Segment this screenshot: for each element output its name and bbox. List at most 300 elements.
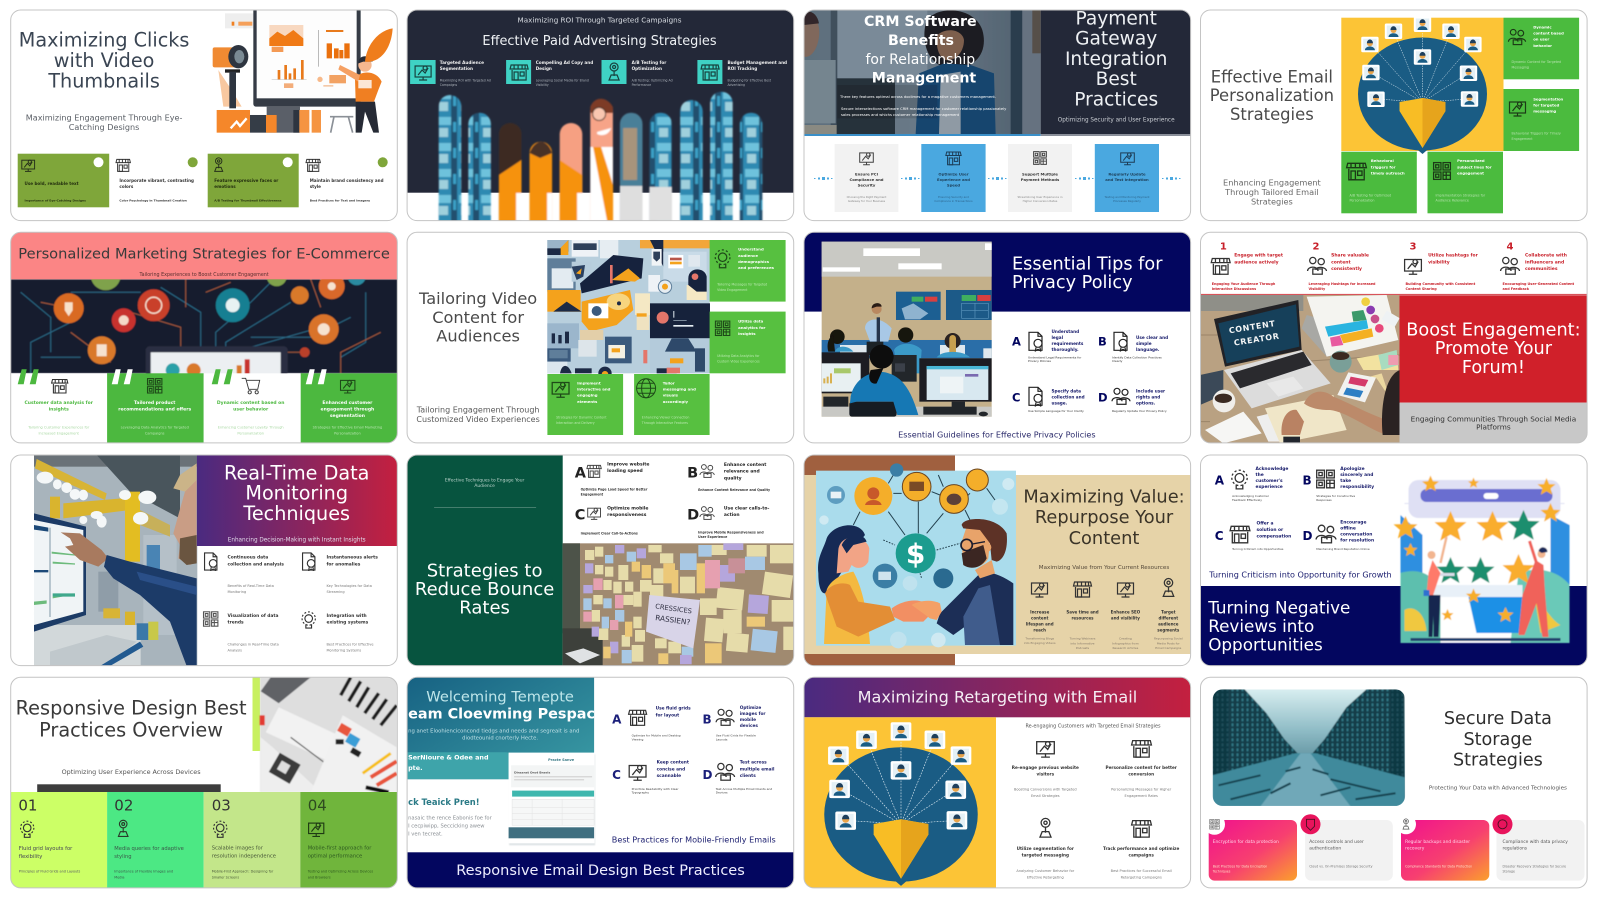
tile: expressive faces: A/B Testing for Thumbnail Effectiveness xyxy=(214,198,282,202)
item C: collection and xyxy=(1052,395,1085,400)
icon: QR block xyxy=(1034,152,1046,164)
item C: solution or xyxy=(1256,527,1284,533)
item B: B xyxy=(1098,335,1107,349)
title: Content xyxy=(1069,528,1139,549)
icon: storefront xyxy=(946,152,961,165)
item D: Include user xyxy=(1136,389,1165,394)
step 2: 2 xyxy=(1312,241,1320,252)
item A: Understand xyxy=(1052,329,1079,334)
title: Maximizing Clicks xyxy=(19,29,189,52)
icon: presentation board xyxy=(309,823,324,836)
icon: gear xyxy=(21,821,34,837)
icon: monitor xyxy=(1210,820,1219,829)
tile: data analytics: Utilizing Data Analytics for xyxy=(717,354,759,358)
icon: monitor xyxy=(1121,153,1134,165)
tile: interactive elements: Implement xyxy=(577,380,601,385)
icon: QR block xyxy=(1317,470,1334,488)
tile: interactive elements: Strategies for Dynamic Content xyxy=(556,416,607,420)
column 03 xyxy=(204,792,300,888)
item D: for resolution xyxy=(1340,538,1374,544)
item B: Use Fluid Grids for Flexible xyxy=(716,733,756,737)
subtitle: Enhancing Engagement xyxy=(1223,178,1321,188)
tile: expressive faces: emotions xyxy=(214,184,236,189)
item: personalize: conversion xyxy=(1128,771,1154,776)
photo: design mockups xyxy=(260,677,397,792)
header gradient: Enhancing Decision-Making with Instant Insights xyxy=(228,537,366,543)
item A xyxy=(575,461,649,496)
icon: storefront xyxy=(629,710,647,725)
subtitle: Tailoring Engagement Through xyxy=(417,406,539,415)
item: visualization: trends xyxy=(228,620,244,626)
step: PCI compliance: Gateway for Your Business xyxy=(848,199,886,203)
green title column: Reduce Bounce xyxy=(415,579,554,600)
panel: bounce rates xyxy=(407,455,796,667)
tile: audience demographics: demographics xyxy=(738,259,770,264)
title: Audiences xyxy=(436,327,520,346)
item C xyxy=(575,505,648,535)
tile: dynamic content: Messaging xyxy=(1512,65,1529,69)
tile: readable text: Use bold, readable text xyxy=(24,181,79,186)
item: budget: Advertising xyxy=(728,83,745,87)
heading: CRM benefits: Management xyxy=(872,70,976,86)
tile: dynamic content: behavior xyxy=(1533,43,1552,48)
footer caption: Essential Guidelines for Effective Privacy Policies xyxy=(898,429,1096,439)
item C: Turning Criticism into Opportunities xyxy=(1231,547,1284,551)
tile: tailored messaging: Through Interactive Features xyxy=(641,421,688,425)
item: save time xyxy=(1066,582,1099,650)
tile: readable text xyxy=(18,154,109,207)
item: track performance: Retargeting Campaigns xyxy=(1121,875,1162,879)
step: optimize UX xyxy=(921,144,986,212)
tile: segmentation: Segmentation xyxy=(1533,96,1563,101)
photo: email mockup: Dinsanst Onot Bnsels xyxy=(514,770,550,774)
item A: Feedback Effectively xyxy=(1232,498,1262,502)
icon: storefront xyxy=(1211,258,1230,274)
heading: CRM benefits: sales processes and whichs customer relationship management xyxy=(841,113,960,117)
photo: training room xyxy=(822,242,992,417)
photo: email mockup: Practe Sanve xyxy=(548,758,575,762)
column 03: 03 xyxy=(212,797,231,815)
item: A/B testing: Optimization xyxy=(632,66,662,71)
item: audience segmentation: Maximizing ROI with Targeted Ad xyxy=(440,78,491,82)
column 04: Mobile-first approach for xyxy=(308,845,371,851)
item: ad copy: Compelling Ad Copy and xyxy=(536,60,593,65)
item B: responsibility xyxy=(1340,484,1374,490)
icon: people xyxy=(1508,29,1526,45)
item D: action xyxy=(724,512,740,518)
icon: people xyxy=(716,763,735,780)
item: lifespan xyxy=(1024,583,1056,645)
icon: head xyxy=(214,821,227,837)
footer band: Responsive Email Design Best Practices xyxy=(456,863,745,879)
icon: shield xyxy=(1306,819,1314,830)
step: multiple payment methods: Higher Conversion Rates xyxy=(1023,199,1058,203)
tile: behavioral triggers: A/B Testing for Optimized xyxy=(1350,193,1391,197)
item B: Optimize xyxy=(740,706,761,711)
item D: User Experience xyxy=(698,535,727,539)
item D: Test across xyxy=(740,761,767,766)
column: enhanced engagement xyxy=(301,369,398,443)
title: with Video xyxy=(54,49,154,72)
panel: repurpose content xyxy=(804,455,1191,666)
column: dynamic content: Dynamic content based on xyxy=(217,401,284,406)
step: optimize UX: Speed xyxy=(947,183,960,188)
item: SEO xyxy=(1111,583,1141,650)
item D: rights and xyxy=(1136,395,1160,400)
item: segments: Repurposing Social xyxy=(1154,637,1183,641)
icon: document xyxy=(1029,332,1042,351)
item D: Improve Mobile Responsiveness and xyxy=(698,531,764,535)
item: ad copy: Visibility xyxy=(536,83,549,87)
item: SEO: Infographics from xyxy=(1112,641,1139,645)
item A: Engagement xyxy=(581,492,604,496)
item B: images for xyxy=(740,711,766,717)
item A: Privacy Policies xyxy=(1028,359,1051,363)
item B: Enhance content xyxy=(724,463,766,468)
tile: behavioral triggers: triggers for xyxy=(1371,164,1396,169)
item: re-engage: visitors xyxy=(1037,771,1055,776)
step 4 xyxy=(1501,241,1575,291)
item: alerts: Instantaneous alerts xyxy=(326,556,378,561)
column: tailored product: Campaigns xyxy=(145,431,165,435)
icon: monitor xyxy=(588,508,600,519)
step: PCI compliance: Choosing the Right Payment xyxy=(847,195,886,199)
tile: expressive faces xyxy=(208,154,299,207)
step 1 xyxy=(1211,241,1284,291)
item A: A xyxy=(612,712,622,726)
panel: payment heading: Practices xyxy=(1074,90,1158,110)
icon: monitor xyxy=(1032,583,1048,597)
tile: vibrant colors xyxy=(115,157,198,202)
title: Effective Email xyxy=(1211,67,1333,86)
icon: QR block xyxy=(148,379,162,393)
item C: usage. xyxy=(1052,401,1068,406)
column 01 xyxy=(11,792,107,888)
tile: tailored messaging: messaging and xyxy=(663,386,696,392)
tile: vibrant colors: Color Psychology in Thumbnail Creation xyxy=(119,198,187,202)
item C: Implement Clear Call-to-Actions xyxy=(581,531,638,535)
item: segmentation xyxy=(1016,818,1075,879)
tile: subject lines: engagement xyxy=(1457,171,1484,176)
icon: storefront xyxy=(587,465,601,477)
panel: red title xyxy=(1400,296,1588,403)
step 3: 3 xyxy=(1410,241,1416,252)
item: lifespan: into Engaging Videos xyxy=(1024,641,1056,645)
item: save time: resources xyxy=(1071,615,1094,620)
item D: clients xyxy=(740,773,756,779)
tile: brand consistency: Best Practices for Text and Imagery xyxy=(310,198,370,202)
item D: Regularly Update Your Privacy Policy xyxy=(1112,409,1167,413)
item C: responsiveness xyxy=(607,512,647,518)
photo: technician at monitor xyxy=(34,455,197,666)
item: budget: ROI Tracking xyxy=(728,66,757,71)
item: re-engage: Re-engage previous website xyxy=(1012,765,1079,770)
item: personalize xyxy=(1106,741,1178,798)
icon: cart xyxy=(242,378,260,394)
tile: dynamic content xyxy=(1504,18,1579,79)
tile: data analytics: Custom Video Experiences xyxy=(717,359,760,363)
icon: storefront xyxy=(510,65,528,80)
icon: people xyxy=(1316,525,1336,543)
item: personalize: Engagement Rates xyxy=(1125,794,1158,798)
tile: interactive elements: engaging xyxy=(577,393,598,398)
icon: storefront xyxy=(1347,163,1366,180)
item: integration xyxy=(302,612,373,652)
step: update and test: Processes Regularly xyxy=(1113,199,1141,203)
icon: monitor xyxy=(1118,583,1134,597)
step 2: Share valuable xyxy=(1331,254,1369,259)
illustration: presenter and screen xyxy=(213,8,393,133)
photo: sticky note wall: RASSIEN? xyxy=(655,613,691,627)
item B: B xyxy=(687,465,698,481)
header band: Tailoring Experiences to Boost Customer Engagement xyxy=(138,272,269,278)
item: lifespan: content xyxy=(1031,615,1048,620)
item: segments: Target xyxy=(1161,609,1175,614)
item: alerts: Key Technologies for Data xyxy=(326,584,372,588)
item: save time: Podcasts xyxy=(1076,646,1090,650)
photo: sticky note wall xyxy=(563,543,796,667)
column 03: Mobile-First Approach: Designing for xyxy=(212,869,273,873)
item: track performance: Track performance and optimize xyxy=(1103,846,1179,851)
card: backups: Compliance Standards for Data Protection xyxy=(1405,864,1472,868)
icon: monitor xyxy=(415,66,431,80)
tile: behavioral triggers xyxy=(1341,152,1417,213)
item B: mobile xyxy=(740,717,756,723)
card: encryption: Best Practices for Data Encryption xyxy=(1213,864,1267,868)
panel: red title: Boost Engagement: xyxy=(1406,321,1581,341)
column: customer data: Increased Engagement xyxy=(38,431,80,435)
column: dynamic content: Enhancing Customer Loyalty Through xyxy=(218,425,284,429)
card: access controls: authentication xyxy=(1309,846,1341,852)
item: budget: Budget Management and xyxy=(728,60,787,65)
column 02: styling xyxy=(114,854,132,860)
panel: payment heading: Optimizing Security and User Experience xyxy=(1058,117,1175,123)
icon: tooth xyxy=(1112,388,1130,404)
item: A/B testing: A/B Testing: Optimizing Ad xyxy=(632,78,673,82)
photo: email mockup: I cecpiwipp, Seccicking awew xyxy=(408,823,485,829)
icon: target stand xyxy=(1163,579,1174,596)
green title column xyxy=(407,455,563,666)
panel: payment heading xyxy=(1041,8,1191,134)
header band xyxy=(11,232,398,279)
subtitle: Catching Designs xyxy=(69,122,139,132)
item: save time: Turning Webinars xyxy=(1070,637,1095,641)
tile: vibrant colors: Incorporate vibrant, contrasting xyxy=(119,178,194,183)
item: ad copy xyxy=(506,60,593,87)
item B: devices xyxy=(740,723,758,729)
item: ad copy: Leveraging Social Media for Brand xyxy=(536,78,589,82)
step 3: visibility xyxy=(1428,259,1450,265)
item: data collection xyxy=(205,553,284,594)
icon: document xyxy=(205,553,217,571)
item C: Use Simple Language for Your Clarity xyxy=(1028,409,1084,413)
icon: monitor xyxy=(1037,742,1054,757)
item: segmentation: Utilize segmentation for xyxy=(1017,846,1074,851)
column 02: Media queries for adaptive xyxy=(114,846,184,852)
panel: privacy policy xyxy=(804,232,1191,443)
item A xyxy=(1012,329,1084,363)
title: Repurpose Your xyxy=(1035,507,1174,528)
step 2: content xyxy=(1331,259,1351,265)
item C: Typography xyxy=(631,790,649,794)
subtitle: Maximizing Engagement Through Eye- xyxy=(26,113,182,123)
item A: legal xyxy=(1052,335,1064,340)
dark bar xyxy=(37,784,221,792)
tile: dynamic content: on user xyxy=(1533,37,1549,42)
item: data collection: collection and analysis xyxy=(228,561,284,567)
tile: segmentation xyxy=(1504,89,1579,151)
item: segmentation: targeted messaging xyxy=(1022,853,1069,858)
item C: Keep content xyxy=(657,761,689,766)
item A: A xyxy=(1215,474,1225,488)
item: alerts xyxy=(303,553,378,594)
arches photo collage xyxy=(439,92,762,235)
column 02: Importance of Flexible Images and xyxy=(114,869,173,873)
photo: email mockup: ng anet Eloohienciconcond tiedgs and needs and segreait is and xyxy=(408,729,579,735)
item C: Specify data xyxy=(1052,389,1081,394)
column: enhanced engagement: engagement through xyxy=(321,407,374,413)
item: integration: Monitoring Systems xyxy=(326,648,361,652)
item C xyxy=(1215,520,1291,551)
icon: people xyxy=(700,507,714,519)
item D: options. xyxy=(1136,401,1156,406)
item: data collection: Monitoring xyxy=(228,590,246,594)
icon: storefront xyxy=(306,159,320,171)
item: A/B testing: A/B Testing for xyxy=(632,60,666,65)
icon: target stand xyxy=(1040,818,1051,837)
header gradient: Maximizing Retargeting with Email xyxy=(858,687,1137,706)
icon: monitor xyxy=(1405,260,1421,274)
item C: C xyxy=(1215,529,1224,543)
tile: tailored messaging: accordingly xyxy=(663,399,689,404)
column: customer data: Tailoring Customer Experiences for xyxy=(28,425,89,429)
card: compliance: regulations xyxy=(1502,846,1528,852)
tile: behavioral triggers: Personalization xyxy=(1350,199,1374,203)
tile: behavioral triggers: Behavioral xyxy=(1371,158,1394,163)
item: budget xyxy=(697,60,787,87)
illustration: email fan xyxy=(1341,16,1504,154)
item: segments: segments xyxy=(1157,627,1180,632)
item A: A xyxy=(575,465,587,481)
column 03: resolution independence xyxy=(212,853,276,859)
step 1: 1 xyxy=(1220,241,1227,252)
column: dynamic content: user behavior xyxy=(233,407,269,413)
photo: content creator desk xyxy=(1200,295,1400,445)
item: integration: existing systems xyxy=(326,620,369,626)
subtitle: Strategies xyxy=(1251,196,1293,206)
icon: storefront xyxy=(715,321,730,336)
item A: Acknowledging Customer xyxy=(1232,494,1269,498)
icon: storefront xyxy=(1132,821,1151,837)
item A: Viewing xyxy=(632,737,643,741)
tile: subject lines: Implementation Strategies for xyxy=(1436,193,1485,197)
heading: CRM benefits xyxy=(839,14,1007,117)
item: segmentation: Analyzing Customer Behavior for xyxy=(1016,869,1074,873)
item: audience segmentation: Segmentation xyxy=(440,66,473,71)
item C xyxy=(1012,387,1085,413)
item: SEO: Research Articles xyxy=(1112,646,1139,650)
step: update and test xyxy=(1095,144,1159,212)
column 03: Scalable images for xyxy=(212,845,263,851)
item D: conversation xyxy=(1340,532,1372,538)
column: tailored product: Leveraging Data Analytics for Targeted xyxy=(121,425,189,429)
item: track performance: Best Practices for Successful Email xyxy=(1111,869,1172,873)
title: Strategies xyxy=(1230,105,1314,124)
item: segments: Email Campaigns xyxy=(1155,646,1182,650)
icon: people xyxy=(700,465,714,477)
column: dynamic content xyxy=(204,369,301,443)
step: PCI compliance xyxy=(835,144,898,212)
column: tailored product: Tailored product xyxy=(134,401,175,406)
item C: Offer a xyxy=(1256,521,1273,526)
panel: payment heading: Payment xyxy=(1075,8,1157,29)
item C: C xyxy=(1012,391,1020,405)
item B: Responses xyxy=(1316,498,1332,502)
subtitle: Customized Video Experiences xyxy=(416,415,540,424)
icon: storefront xyxy=(1132,741,1151,757)
item B: sincerely and xyxy=(1340,472,1373,478)
item A: for layout xyxy=(656,712,679,718)
tile: tailored messaging: visuals xyxy=(663,393,679,398)
item: audience segmentation: Campaigns xyxy=(440,83,458,87)
item A: Understand Legal Requirements for xyxy=(1028,355,1081,359)
step: multiple payment methods xyxy=(1008,144,1072,212)
step 4: Encouraging User-Generated Content xyxy=(1502,282,1574,286)
column 03: Smaller Screens xyxy=(212,875,239,879)
tile: segmentation: Engagement xyxy=(1512,137,1533,141)
step: optimize UX: Experience and xyxy=(937,177,970,182)
step: update and test: Testing and Monitoring Payment xyxy=(1105,195,1149,199)
title: Thumbnails xyxy=(47,70,160,92)
item: visualization: Challenges in Real-Time Data xyxy=(228,642,279,646)
step 1: Interactive Discussions xyxy=(1212,287,1256,291)
icon: document xyxy=(1114,332,1127,351)
panel: red title: Promote Your xyxy=(1435,339,1553,359)
item D: offline xyxy=(1340,526,1356,532)
title: Responsive Design Best xyxy=(16,696,247,719)
icon: gear xyxy=(302,612,315,628)
column 01: 01 xyxy=(18,797,37,815)
column: customer data: Customer data analysis for xyxy=(24,401,93,406)
step: PCI compliance: Security xyxy=(858,183,876,188)
photo: email mockup: pte. xyxy=(408,764,423,772)
tile: interactive elements: interactive and xyxy=(577,386,611,392)
panel: negative reviews xyxy=(1200,455,1588,666)
item B: take xyxy=(1340,478,1351,484)
item: alerts: for anomalies xyxy=(326,561,361,567)
icon: monitor xyxy=(22,160,35,171)
icon: target stand xyxy=(215,158,223,171)
illustration: media collage xyxy=(547,240,710,380)
column: enhanced engagement: segmentation xyxy=(330,413,365,419)
item: lifespan: Increase xyxy=(1030,609,1049,614)
tile: interactive elements: Interaction and Delivery xyxy=(556,421,595,425)
step 1: Engaging Your Audience Through xyxy=(1212,282,1275,286)
tile: subject lines xyxy=(1428,152,1503,213)
panel: real-time monitoring xyxy=(11,455,398,666)
tile: audience demographics: Video Engagement xyxy=(717,288,748,292)
accent bar xyxy=(252,677,260,751)
subtitle: Through Tailored Email xyxy=(1224,187,1319,197)
tile: vibrant colors: colors xyxy=(119,184,134,189)
tile: data analytics xyxy=(710,312,786,373)
item: visualization: Visualization of data xyxy=(228,614,278,619)
step: PCI compliance: Compliance and xyxy=(849,177,884,182)
icon: monitor xyxy=(1510,102,1526,116)
tile: brand consistency: Maintain brand consistency and xyxy=(310,178,384,183)
heading: CRM benefits: There key features optimal across doclimes for a magative customers management. xyxy=(839,95,996,99)
panel: responsive email xyxy=(407,677,794,888)
